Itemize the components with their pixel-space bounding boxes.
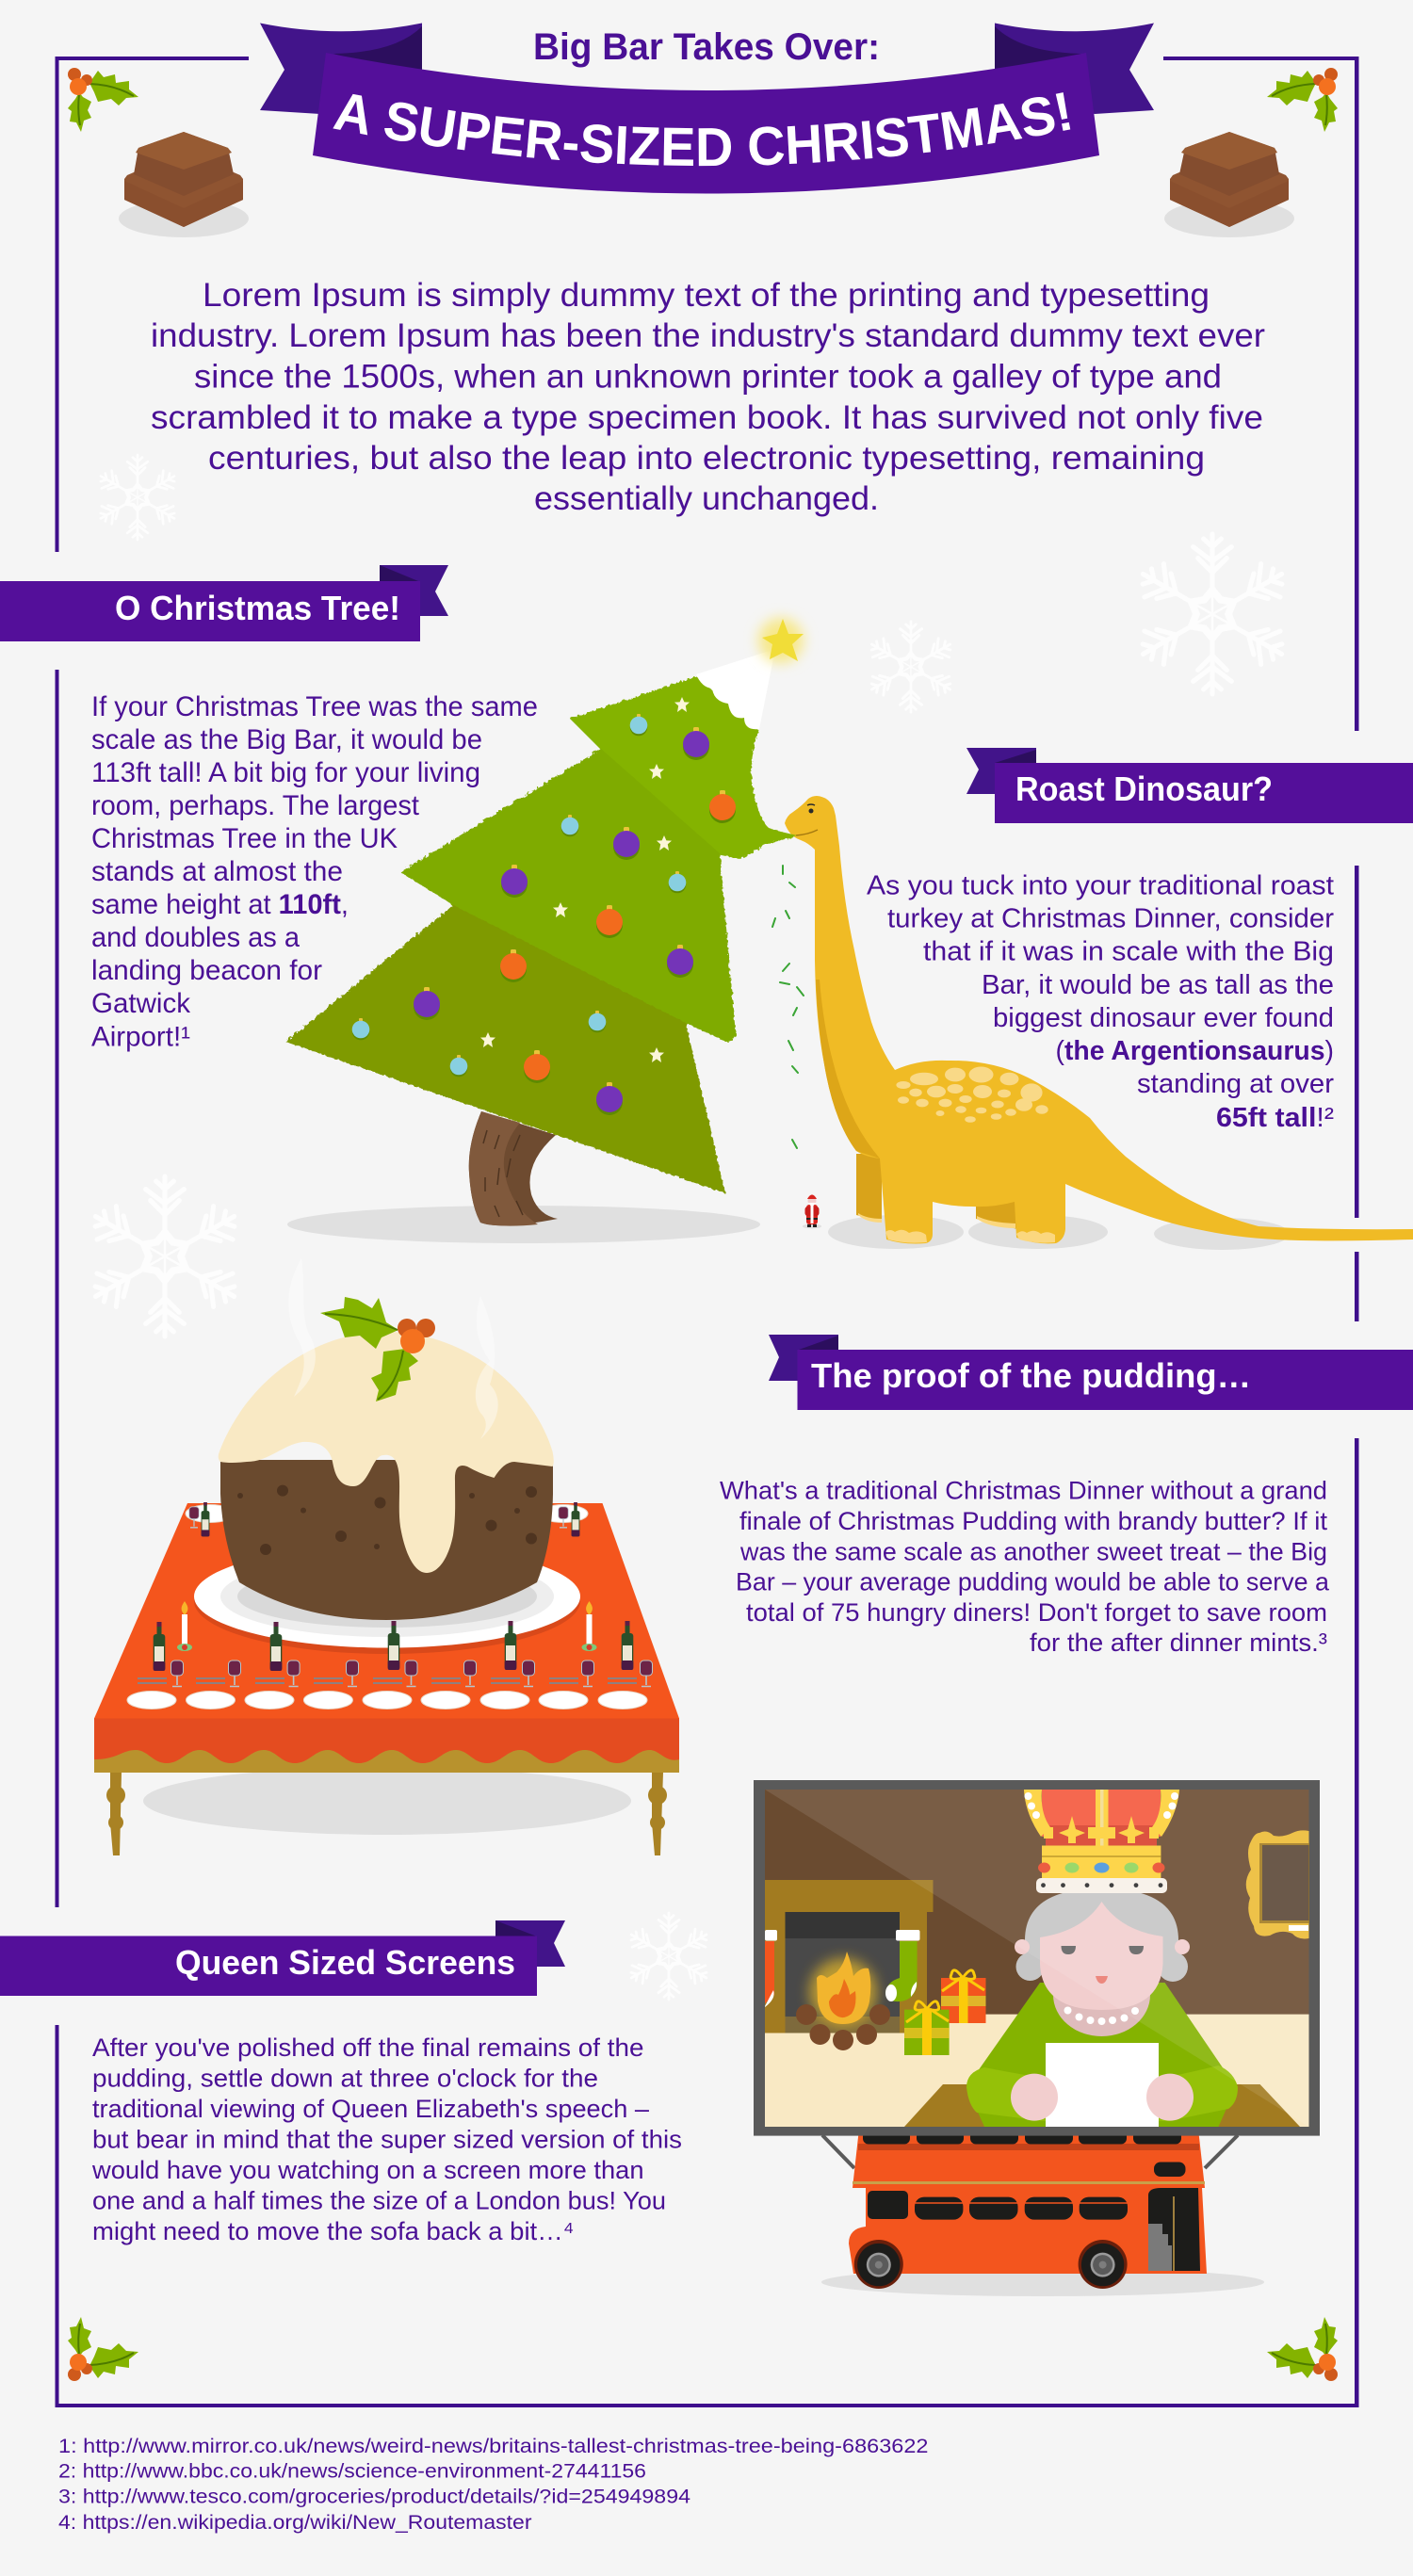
dinosaur ground shadows <box>828 1215 1290 1250</box>
footnotes: 4: https://en.wikipedia.org/wiki/New_Routemaster <box>58 2512 531 2534</box>
footnotes: 3: http://www.tesco.com/groceries/product/details/?id=254949894 <box>58 2487 690 2507</box>
holly: bottom left <box>68 2317 138 2381</box>
text block: Christmas tree: 113ft tall! A bit big for your living <box>91 757 480 788</box>
screen glare <box>765 1790 1309 2127</box>
text block: Queen's speech: After you've polished off the final remains of the <box>92 2033 644 2062</box>
fire and logs <box>796 1952 890 2050</box>
text block: Roast dinosaur: standing at over <box>1137 1069 1334 1099</box>
section banner: The proof of the pudding <box>769 1335 1413 1410</box>
dinosaur face <box>796 804 818 835</box>
tiny santa <box>803 1194 821 1228</box>
intro paragraph: Lorem Ipsum is simply dummy text of the printing and typesetting <box>203 277 1210 314</box>
falling pine needles <box>772 866 804 1148</box>
footnotes: 2: http://www.bbc.co.uk/news/science-environment-27441156 <box>58 2460 646 2483</box>
steam wisps <box>288 1258 498 1439</box>
queen speech paper <box>1046 2043 1159 2127</box>
holly: bottom right <box>1267 2317 1338 2381</box>
back table settings <box>186 1502 588 1536</box>
pudding holly <box>320 1297 435 1401</box>
text block: Roast dinosaur: 65ft tall!² <box>1216 1103 1334 1133</box>
queen pearls <box>1064 2006 1139 2025</box>
serving plate <box>194 1545 580 1654</box>
presents <box>904 1970 985 2055</box>
text block: pudding: Bar – your average pudding would be able to serve a <box>736 1567 1330 1596</box>
tablecloth front with scallops <box>94 1718 679 1763</box>
tree snow cap <box>696 649 775 729</box>
text block: Queen's speech: might need to move the sofa back a bit…⁴ <box>92 2217 575 2245</box>
section banner: Queen Sized Screens <box>0 1920 565 1996</box>
queen figure <box>966 1790 1238 2127</box>
main title text: A SUPER-SIZED CHRISTMAS! <box>333 92 1070 166</box>
illustration: dinosaur <box>769 796 1413 1250</box>
text block: Roast dinosaur: As you tuck into your traditional roast <box>867 870 1334 900</box>
text block: Queen's speech <box>91 2033 682 2245</box>
chocolate chunk: right <box>1164 132 1294 237</box>
section banner: Roast Dinosaur <box>966 748 1413 823</box>
text block: Christmas tree: If your Christmas Tree was the same <box>91 691 538 722</box>
text block: Christmas tree: landing beacon for <box>91 955 322 986</box>
illustration: Christmas tree <box>285 618 821 1243</box>
text block: Christmas tree: Gatwick <box>91 988 191 1019</box>
snowflake: left large <box>86 1176 244 1337</box>
text block: Queen's speech: pudding, settle down at three o'clock for the <box>92 2065 598 2093</box>
dinosaur rear legs <box>856 1154 1017 1229</box>
text block: pudding: was the same scale as another sweet treat – the Big <box>739 1537 1327 1565</box>
chocolate chunk: left <box>119 132 249 237</box>
intro paragraph: industry. Lorem Ipsum has been the industry's standard dummy text ever <box>151 317 1265 354</box>
queen sleeves and body <box>966 1983 1236 2127</box>
table top <box>94 1503 679 1718</box>
illustration: bus under television <box>754 1780 1320 2296</box>
text block: pudding: finale of Christmas Pudding with brandy butter? If it <box>739 1507 1328 1535</box>
tv screen scene <box>765 1790 1309 2127</box>
text block: Queen's speech: traditional viewing of Queen Elizabeth's speech – <box>92 2095 649 2123</box>
desk <box>904 2084 1300 2127</box>
dinosaur back spots <box>896 1066 1048 1123</box>
footnotes <box>58 2436 929 2534</box>
text block: Roast dinosaur <box>867 870 1334 1133</box>
text block: Christmas tree: Christmas Tree in the UK <box>91 823 398 854</box>
dinosaur body <box>785 796 1413 1243</box>
text block: Christmas tree: scale as the Big Bar, it would be <box>91 724 482 755</box>
tv stand legs <box>822 2135 1238 2168</box>
fireplace <box>765 1880 933 2033</box>
text block: Queen's speech: but bear in mind that the super sized version of this <box>92 2125 682 2153</box>
text block: pudding: What's a traditional Christmas Dinner without a grand <box>720 1477 1327 1505</box>
christmas stockings <box>765 1930 919 2007</box>
pudding icing <box>219 1332 554 1573</box>
pudding raisins <box>237 1485 537 1555</box>
text block: Christmas tree: Airport!¹ <box>91 1021 190 1053</box>
text block: pudding: total of 75 hungry diners! Don't forget to save room <box>746 1598 1327 1627</box>
intro paragraph: centuries, but also the leap into electronic typesetting, remaining <box>208 440 1205 477</box>
section banner: O Christmas Tree <box>0 565 448 641</box>
table ground shadow <box>143 1767 631 1835</box>
table legs <box>106 1773 667 1855</box>
tree ornaments <box>352 697 736 1115</box>
tree ground shadow <box>287 1206 760 1243</box>
holly: top right <box>1267 68 1338 132</box>
leaf branch in mouth <box>769 829 797 841</box>
bus lower deck <box>849 2188 1207 2274</box>
tree trunk <box>469 1111 558 1226</box>
text block: Christmas tree: and doubles as a <box>91 922 300 953</box>
tree top star <box>758 618 804 663</box>
table gold trim <box>94 1742 679 1773</box>
neck shade <box>816 980 880 1158</box>
section banner: O Christmas Tree: O Christmas Tree! <box>115 589 400 627</box>
text block: Christmas tree: same height at 110ft, <box>91 889 349 920</box>
intro paragraph: essentially unchanged. <box>534 480 879 517</box>
subtitle text: Big Bar Takes Over: <box>533 26 880 68</box>
text block: pudding: for the after dinner mints.³ <box>1030 1628 1327 1657</box>
text block: Roast dinosaur: turkey at Christmas Dinner, consider <box>887 904 1334 934</box>
text block: pudding <box>720 1477 1330 1657</box>
intro paragraph: since the 1500s, when an unknown printer took a galley of type and <box>194 358 1222 396</box>
text block: Christmas tree <box>91 691 538 1053</box>
television frame <box>754 1780 1320 2136</box>
dinosaur toes <box>885 1230 1055 1243</box>
text block: Roast dinosaur: Bar, it would be as tall as the <box>982 970 1334 1000</box>
bus upper deck <box>853 2129 1205 2188</box>
holly: top left <box>68 68 138 132</box>
text block: Roast dinosaur: that if it was in scale with the Big <box>923 936 1334 966</box>
bus ground shadow <box>821 2268 1264 2296</box>
title ribbon <box>260 23 1154 194</box>
queen hands <box>1011 2074 1194 2121</box>
section banner: Queen Sized Screens: Queen Sized Screens <box>175 1943 515 1982</box>
snowflake: top left <box>96 455 179 540</box>
section banner: The proof of the pudding: The proof of the pudding… <box>811 1356 1251 1395</box>
intro paragraph: scrambled it to make a type specimen book. It has survived not only five <box>151 399 1263 436</box>
picture frame on wall <box>1246 1830 1309 1938</box>
illustration: pudding on table <box>94 1258 679 1855</box>
bus wheels <box>854 2240 1128 2289</box>
queen neck <box>1053 1953 1150 2036</box>
front table settings <box>127 1601 652 1709</box>
text block: Roast dinosaur: (the Argentionsaurus) <box>1055 1036 1334 1066</box>
section banner: Roast Dinosaur: Roast Dinosaur? <box>1015 770 1273 808</box>
text block: Roast dinosaur: biggest dinosaur ever found <box>993 1003 1334 1033</box>
queen face <box>1040 1902 1162 2010</box>
queen crown <box>1024 1790 1179 1893</box>
text block: Christmas tree: stands at almost the <box>91 856 343 887</box>
snowflake: upper centre small <box>867 622 955 712</box>
queen hair back <box>1015 1888 1188 1982</box>
intro paragraph <box>151 277 1265 517</box>
pudding body <box>220 1460 553 1620</box>
snowflake: upper right large <box>1133 534 1291 694</box>
tree foliage tiers <box>285 676 795 1193</box>
text block: Christmas tree: room, perhaps. The largest <box>91 790 420 821</box>
footnotes: 1: http://www.mirror.co.uk/news/weird-news/britains-tallest-christmas-tree-being-6863622 <box>58 2436 929 2457</box>
text block: Queen's speech: would have you watching on a screen more than <box>91 2156 644 2184</box>
text block: Queen's speech: one and a half times the size of a London bus! You <box>92 2187 666 2215</box>
snowflake: queen section <box>626 1913 711 2000</box>
